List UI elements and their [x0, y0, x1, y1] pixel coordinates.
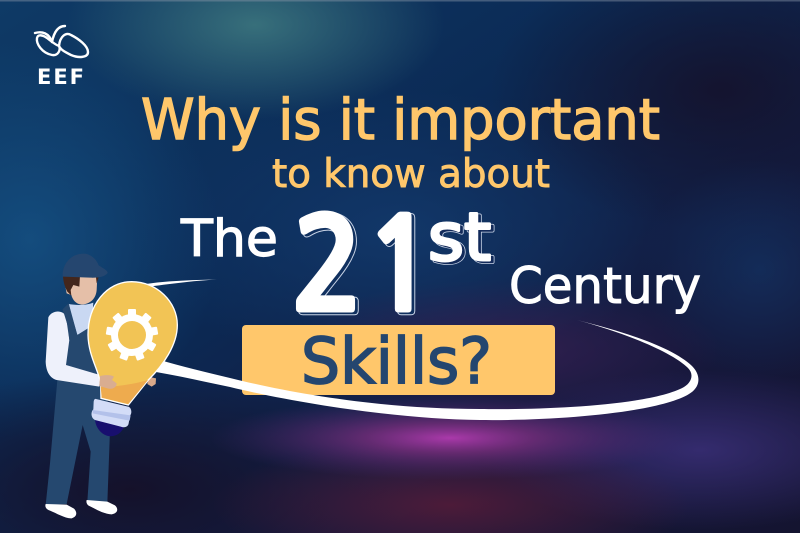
- outline shadow of st: st: [431, 201, 494, 278]
- logo: EEF: [35, 26, 88, 89]
- big number 21: 21: [291, 203, 437, 329]
- logo wordmark: EEF: [37, 65, 84, 89]
- worker overalls: [46, 298, 110, 505]
- heading: The 21st Century: [180, 199, 701, 331]
- heading word: The: The: [180, 210, 278, 269]
- swoosh upper tail: [146, 280, 217, 287]
- overall strap edge: [63, 303, 75, 340]
- title: why is it important: Why is it important: [141, 88, 660, 153]
- heading word: Century: Century: [509, 257, 701, 315]
- label box: Skills?: [242, 325, 555, 398]
- outline shadow of 21: 21: [294, 205, 440, 331]
- worker back hand: [147, 377, 156, 387]
- worker head: [63, 276, 99, 305]
- illustration: worker holding light bulb: [45, 254, 177, 518]
- outline shadow of st: st: [431, 201, 494, 278]
- worker arm: [46, 311, 100, 387]
- bulb lower shade: [101, 380, 148, 404]
- superscript st: st: [428, 199, 491, 276]
- worker shoes: [45, 500, 117, 518]
- label box: Skills?: Skills?: [301, 325, 492, 398]
- bulb glass: [88, 282, 177, 405]
- icon: butterfly logo: [35, 26, 88, 57]
- gear icon: [106, 309, 158, 361]
- worker cap: [63, 254, 108, 278]
- swoosh: [156, 320, 698, 420]
- worker collar: [68, 303, 93, 335]
- screw thread shade: [93, 410, 131, 421]
- light bulb: [88, 282, 177, 436]
- worker hand: [99, 375, 117, 389]
- outline shadow of 21: 21: [294, 205, 440, 331]
- subtitle: to know about: to know about: [272, 152, 550, 197]
- bulb screw base: [92, 399, 131, 427]
- bulb tip: [95, 420, 124, 436]
